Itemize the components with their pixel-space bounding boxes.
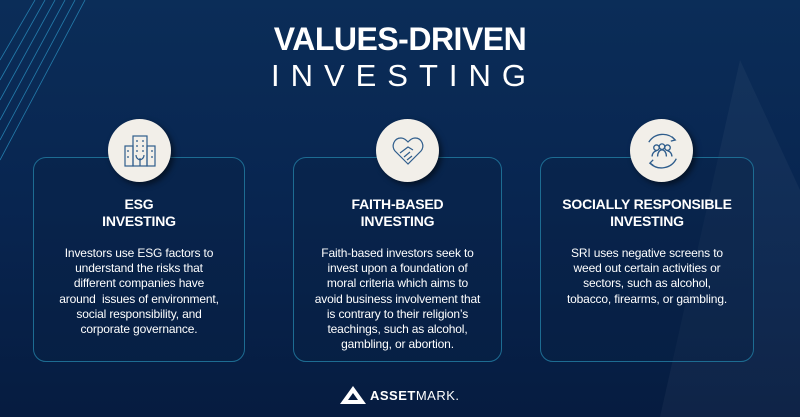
text: faith: invest upon a foundation of bbox=[327, 261, 468, 275]
panel: ESG bbox=[33, 157, 245, 362]
heading: ESG bbox=[102, 196, 176, 229]
title: VALUES-DRIVEN bbox=[274, 21, 526, 57]
text: SRI: tobacco, firearms, or gambling. bbox=[567, 292, 727, 306]
heading: ESG: INVESTING bbox=[102, 213, 176, 229]
icon: community cycle bbox=[630, 119, 693, 182]
heading: SRI: INVESTING bbox=[610, 213, 684, 229]
text: SRI: SRI uses negative screens to bbox=[571, 246, 723, 260]
title bbox=[271, 21, 537, 93]
icon: building bbox=[108, 119, 171, 182]
panel: SRI bbox=[540, 157, 754, 362]
text: faith: is contrary to their religion’s bbox=[327, 307, 468, 321]
heading: faith: INVESTING bbox=[361, 213, 434, 229]
panel: faith bbox=[293, 157, 502, 362]
text: faith bbox=[315, 246, 480, 351]
heading: ESG: ESG bbox=[125, 196, 153, 212]
title: INVESTING bbox=[271, 58, 537, 93]
text: ESG: around issues of environment, bbox=[59, 292, 219, 306]
text: ESG: social responsibility, and bbox=[76, 307, 202, 321]
text: SRI: sectors, such as alcohol, bbox=[583, 276, 711, 290]
text: ESG: corporate governance. bbox=[81, 322, 197, 336]
text: ESG: understand the risks that bbox=[75, 261, 203, 275]
heading: SRI: SOCIALLY RESPONSIBLE bbox=[562, 196, 732, 212]
text: faith: avoid business involvement that bbox=[315, 292, 480, 306]
logo: AssetMark: ASSETMARK. bbox=[370, 388, 460, 402]
text: ESG bbox=[59, 246, 219, 336]
text: faith: Faith-based investors seek to bbox=[321, 246, 474, 260]
heading: faith: FAITH-BASED bbox=[352, 196, 443, 212]
text: faith: gambling, or abortion. bbox=[341, 337, 454, 351]
icon: heart handshake bbox=[376, 119, 439, 182]
heading: SRI bbox=[562, 196, 732, 229]
text: ESG: Investors use ESG factors to bbox=[65, 246, 213, 260]
logo: AssetMark bbox=[340, 386, 460, 404]
text: SRI: weed out certain activities or bbox=[574, 261, 720, 275]
text: ESG: different companies have bbox=[74, 276, 204, 290]
heading: faith bbox=[352, 196, 443, 229]
text: faith: teachings, such as alcohol, bbox=[327, 322, 468, 336]
text: SRI bbox=[567, 246, 727, 306]
text: faith: moral criteria which aims to bbox=[327, 276, 468, 290]
